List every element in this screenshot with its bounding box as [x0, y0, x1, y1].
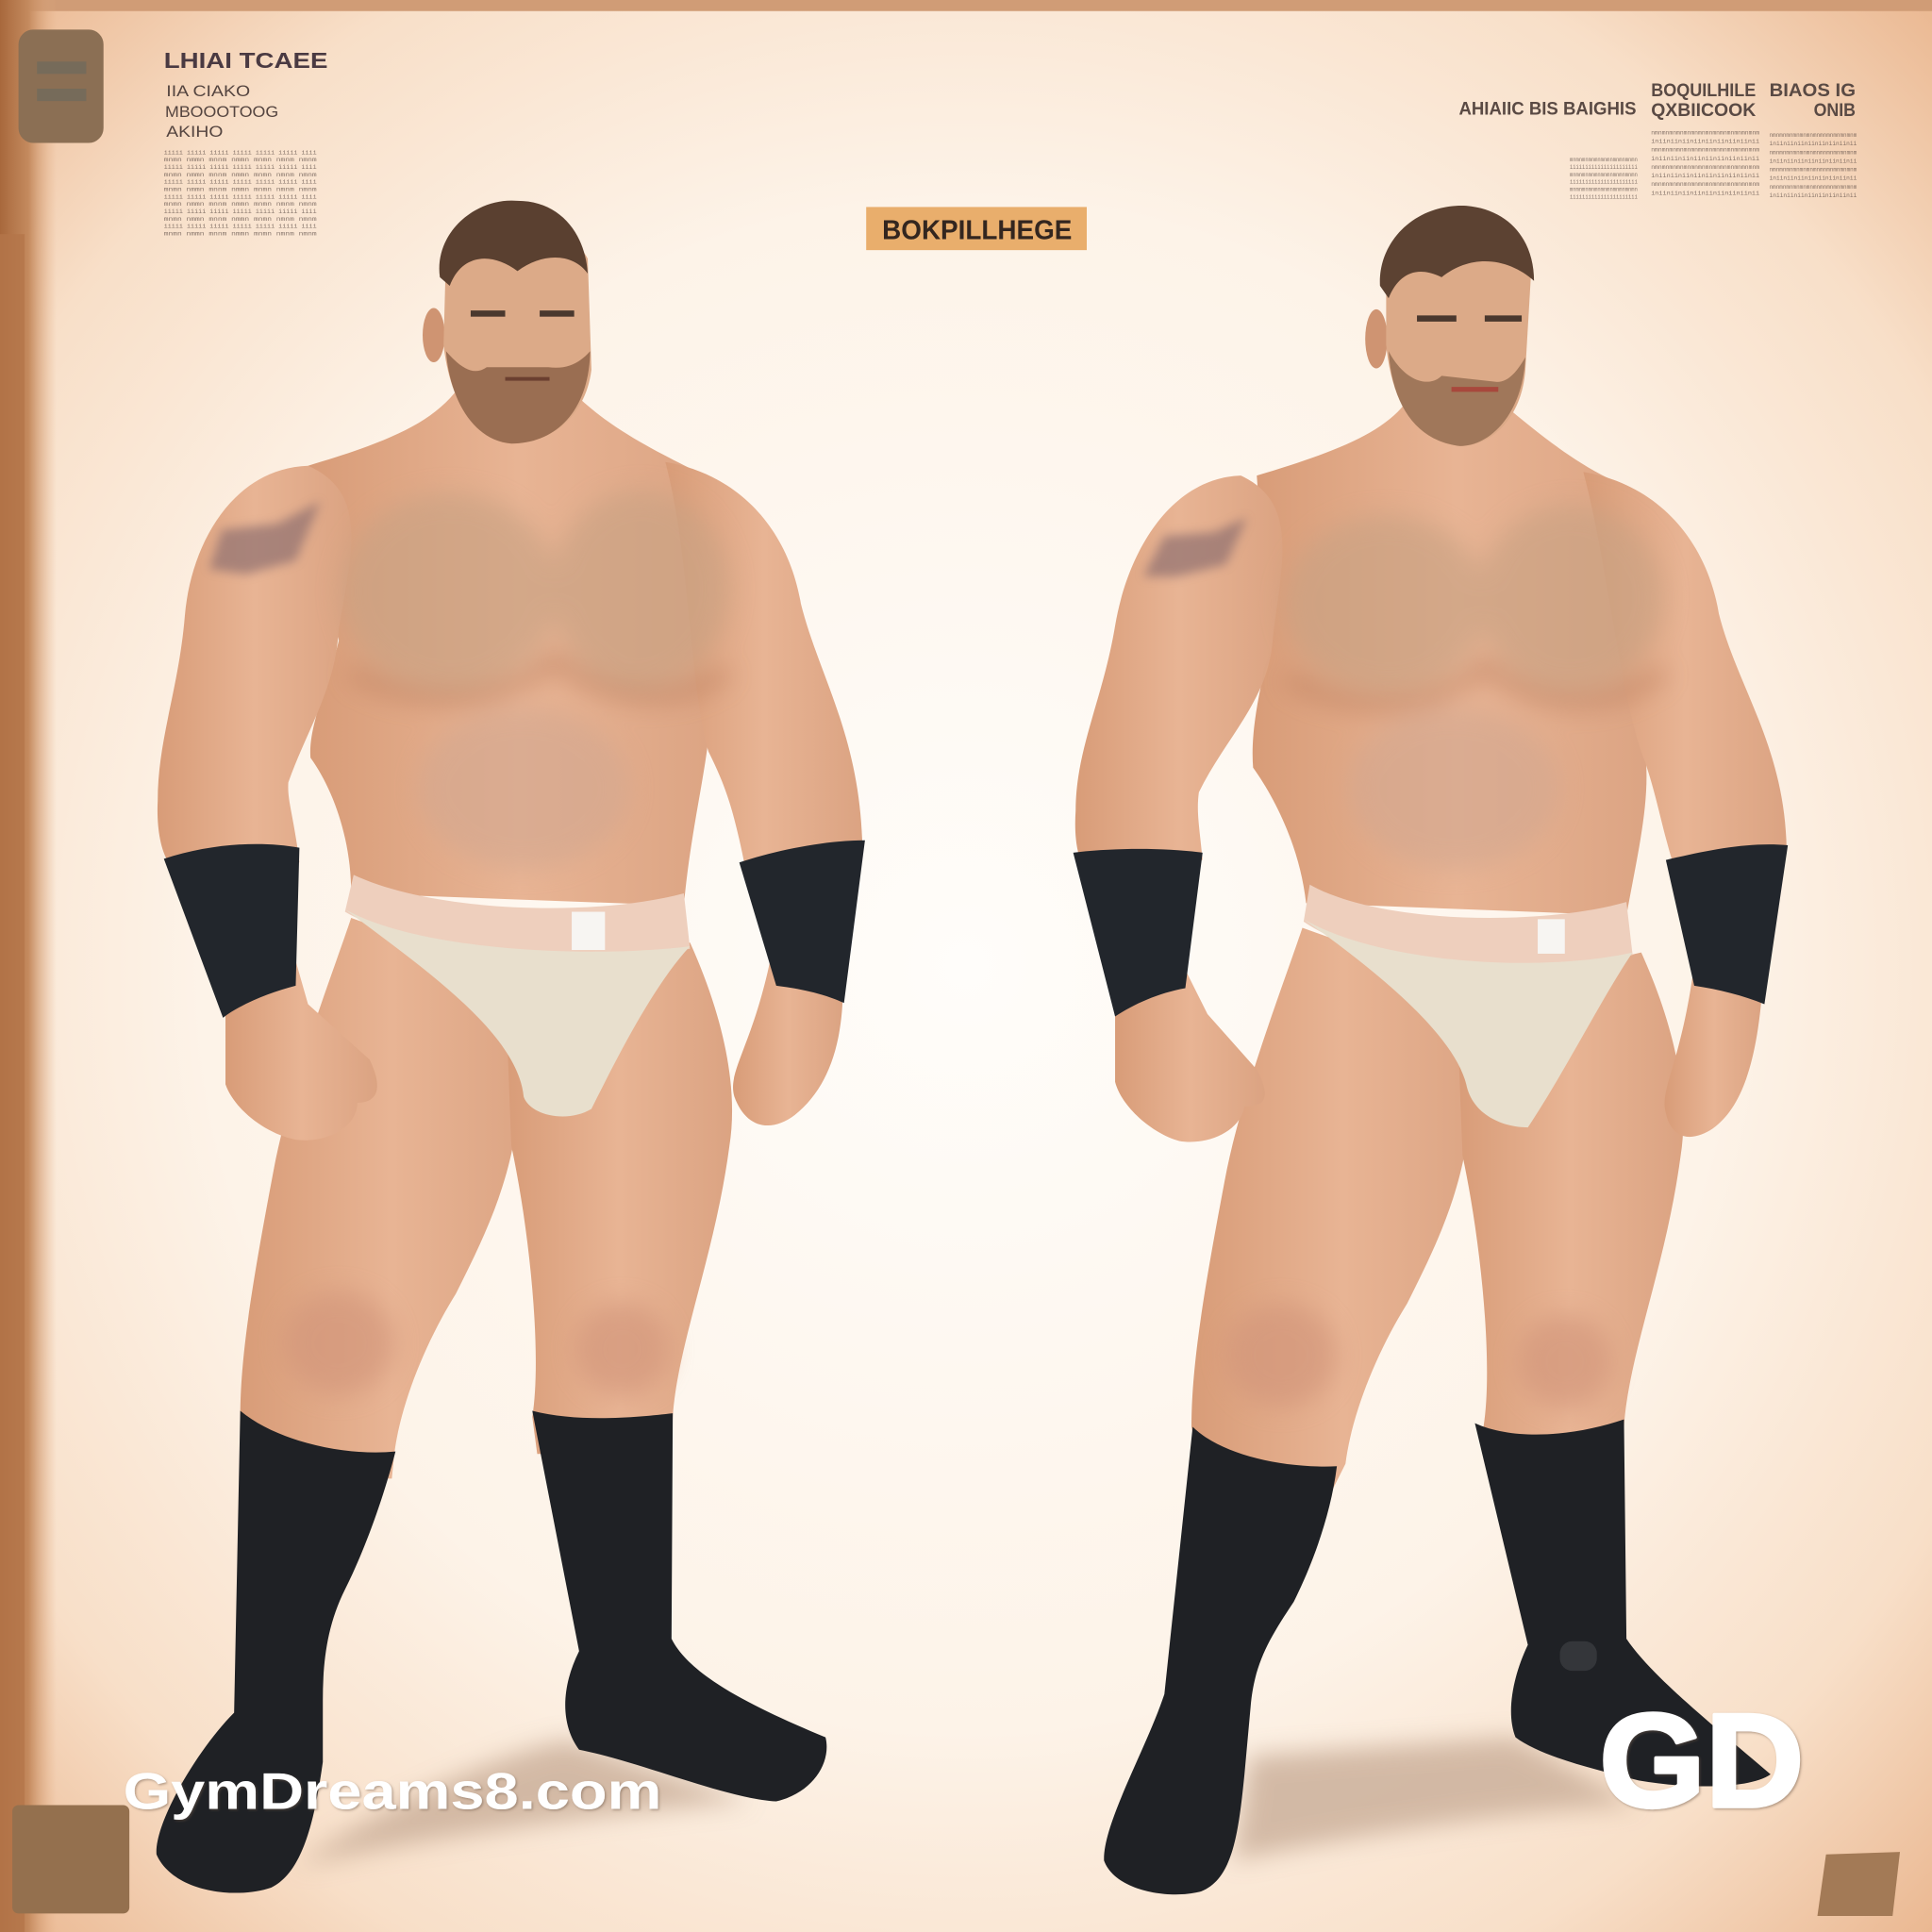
- small print: top right column 2: nmnmnmnmnmnmnmnmnmnmnmnmnmnmnm: [1651, 181, 1759, 188]
- small print: top right column 2: [1651, 129, 1759, 196]
- small print: top right column 1: iiiiiiiiiiiiiiiiiiiiii: [1570, 164, 1638, 171]
- left figure: wrist bands: [164, 841, 865, 1018]
- small print: top right column 2: iniiniiniiniiniiniiniiniinii: [1651, 139, 1759, 145]
- heading: top right: AHIAIIC BIS BAIGHIS: [1458, 98, 1637, 119]
- small print: top right column 3: iniiniiniiniiniiniiniinii: [1770, 141, 1857, 147]
- small print: top left: mnmn nmmn mnnm nmmn mnmn nmnm nmnm: [164, 201, 317, 208]
- right figure: head: [1365, 206, 1534, 446]
- small print: top right column 2: nmnmnmnmnmnmnmnmnmnmnmnmnmnmnm: [1651, 147, 1759, 154]
- heading: top right: BOQUILHILE: [1651, 80, 1756, 101]
- right figure: torso and arms: [1075, 404, 1787, 1141]
- left figure: muscle shading: [283, 491, 729, 1396]
- small print: top right column 3: iniiniiniiniiniiniiniinii: [1770, 192, 1857, 199]
- watermark: site name: GymDreams8.com: [124, 1761, 661, 1820]
- small print: top right column 1: mnmnmnmnmnmnmnmnmnmnmn: [1570, 172, 1638, 178]
- small print: top right column 3: iniiniiniiniiniiniiniinii: [1770, 175, 1857, 182]
- figure: right: [1074, 206, 1788, 1894]
- small print: top left: iiiii iiiii iiiii iiiii iiiii iiiii iiii: [164, 164, 317, 171]
- right figure: socks: [1104, 1420, 1771, 1894]
- heading: top right: QXBIICOOK: [1651, 100, 1756, 121]
- left figure: tattoo: [209, 502, 321, 575]
- heading: top left: LHIAI TCAEE: [164, 48, 327, 73]
- heading: top right: ONIB: [1814, 100, 1856, 121]
- small print: top right column 1: iiiiiiiiiiiiiiiiiiiiii: [1570, 179, 1638, 186]
- figure: left: [157, 201, 865, 1893]
- left figure: head: [423, 201, 591, 443]
- small print: top right column 3: [1770, 132, 1857, 199]
- centre title label: BOKPILLHEGE: [882, 215, 1072, 245]
- left figure: waistband and shorts: [345, 874, 690, 1116]
- small print: top right column 3: iniiniiniiniiniiniiniinii: [1770, 158, 1857, 164]
- sub-lines: top left: IIA CIAKO: [166, 82, 250, 100]
- small print: top left: [164, 149, 317, 237]
- small print: top left: iiiii iiiii iiiii iiiii iiiii iiiii iiii: [164, 193, 317, 200]
- heading: top right: BIAOS IG: [1770, 80, 1856, 101]
- small print: top right column 1: mnmnmnmnmnmnmnmnmnmnmn: [1570, 157, 1638, 163]
- sub-lines: top left: AKIHO: [166, 123, 223, 141]
- stone patch: bottom right: [1818, 1852, 1900, 1916]
- small print: top right column 3: nmnmnmnmnmnmnmnmnmnmnmnmnm: [1770, 149, 1857, 156]
- left figure: socks: [157, 1411, 826, 1893]
- text block: top left: [164, 48, 327, 237]
- centre title label: [866, 207, 1087, 250]
- small print: top right column 2: iniiniiniiniiniiniiniiniinii: [1651, 173, 1759, 179]
- right figure: wrist bands: [1074, 844, 1788, 1017]
- right figure: legs: [1191, 928, 1683, 1489]
- small print: top left: mnmn nmmn mnnm nmmn mnmn nmnm nmnm: [164, 157, 317, 163]
- floor shadow: right figure: [1232, 1738, 1639, 1860]
- small print: top right column 1: [1570, 157, 1638, 200]
- small print: top left: iiiii iiiii iiiii iiiii iiiii iiiii iiii: [164, 208, 317, 215]
- right figure: waistband and shorts: [1304, 885, 1633, 1127]
- left figure: torso and arms: [158, 388, 862, 1141]
- small print: top right column 1: iiiiiiiiiiiiiiiiiiiiii: [1570, 193, 1638, 200]
- small print: top right column 1: mnmnmnmnmnmnmnmnmnmnmn: [1570, 186, 1638, 192]
- small print: top left: mnmn nmmn mnnm nmmn mnmn nmnm nmnm: [164, 230, 317, 237]
- left figure: legs: [241, 918, 732, 1478]
- sub-lines: top left: [165, 82, 278, 141]
- small print: top right column 2: nmnmnmnmnmnmnmnmnmnmnmnmnmnmnm: [1651, 164, 1759, 171]
- small print: top right column 3: nmnmnmnmnmnmnmnmnmnmnmnmnm: [1770, 132, 1857, 139]
- small print: top left: iiiii iiiii iiiii iiiii iiiii iiiii iiii: [164, 179, 317, 186]
- small print: top left: iiiii iiiii iiiii iiiii iiiii iiiii iiii: [164, 149, 317, 156]
- logo: GD: GD: [1599, 1686, 1804, 1835]
- floor shadow: left figure: [295, 1740, 752, 1867]
- small print: top right column 3: nmnmnmnmnmnmnmnmnmnmnmnmnm: [1770, 167, 1857, 174]
- small print: top left: mnmn nmmn mnnm nmmn mnmn nmnm nmnm: [164, 172, 317, 178]
- text block: top right: [1458, 80, 1857, 200]
- small print: top right column 3: nmnmnmnmnmnmnmnmnmnmnmnmnm: [1770, 184, 1857, 191]
- heading: top right: [1458, 80, 1856, 121]
- right figure: muscle shading: [1226, 506, 1663, 1408]
- small print: top left: iiiii iiiii iiiii iiiii iiiii iiiii iiii: [164, 224, 317, 230]
- small print: top right column 2: iniiniiniiniiniiniiniiniinii: [1651, 156, 1759, 162]
- small print: top right column 2: nmnmnmnmnmnmnmnmnmnmnmnmnmnmnm: [1651, 129, 1759, 136]
- right figure: tattoo: [1143, 518, 1247, 576]
- sub-lines: top left: MBOOOTOOG: [165, 103, 278, 121]
- stone patch: top left: [19, 29, 104, 143]
- small print: top right column 2: iniiniiniiniiniiniiniiniinii: [1651, 190, 1759, 196]
- small print: top left: mnmn nmmn mnnm nmmn mnmn nmnm nmnm: [164, 216, 317, 223]
- stone patch: bottom left: [12, 1805, 129, 1913]
- small print: top left: mnmn nmmn mnnm nmmn mnmn nmnm nmnm: [164, 186, 317, 192]
